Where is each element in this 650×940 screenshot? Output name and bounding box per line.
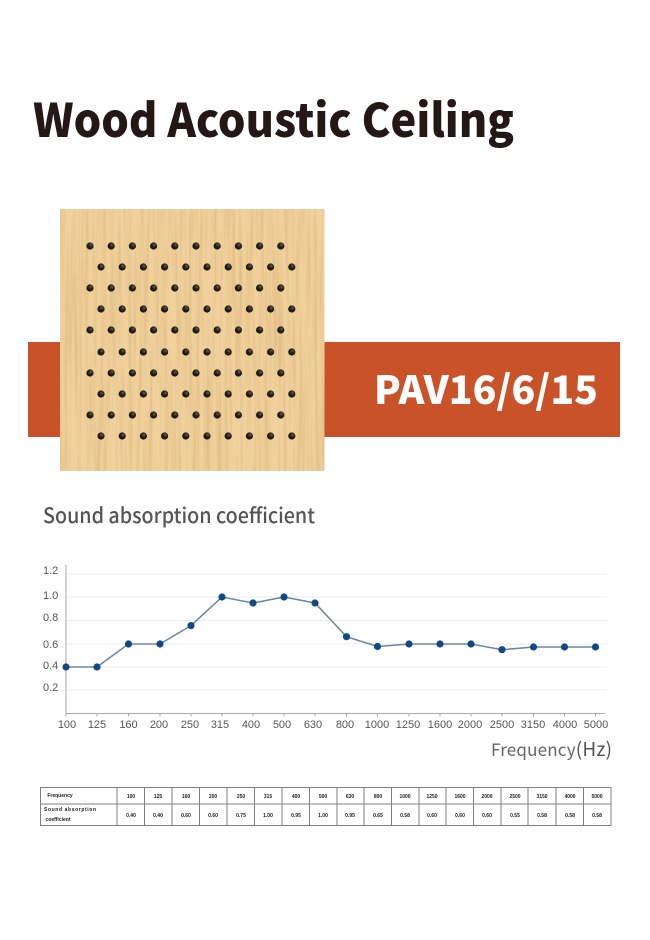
table row: frequency <box>47 793 603 800</box>
axis title: Frequency(Hz) <box>491 735 612 762</box>
x axis labels: 315 <box>211 719 229 731</box>
x axis labels: 200 <box>150 719 168 731</box>
table row: frequency: 100 <box>127 794 135 800</box>
table row: frequency: 2500 <box>509 794 521 800</box>
table row: sound absorption coefficient: 1.00 <box>318 813 328 819</box>
y axis labels <box>43 565 58 694</box>
holes <box>86 242 295 440</box>
x axis labels: 3150 <box>521 719 545 731</box>
x axis labels: 1000 <box>365 719 389 731</box>
table row: sound absorption coefficient <box>44 807 602 823</box>
line chart: sound absorption coefficient by frequency <box>43 565 612 762</box>
perforated wood panel <box>60 209 324 471</box>
x axis labels: 2500 <box>490 719 514 731</box>
x axis labels: 4000 <box>553 719 577 731</box>
table row: sound absorption coefficient: 0.58 <box>400 813 410 819</box>
x axis labels: 125 <box>88 719 106 731</box>
table row: sound absorption coefficient: 0.60 <box>482 813 492 819</box>
table row: sound absorption coefficient: 0.75 <box>236 813 246 819</box>
table row: sound absorption coefficient: 0.60 <box>455 813 465 819</box>
x axis labels: 1250 <box>396 719 420 731</box>
x axis labels: 800 <box>336 719 354 731</box>
x axis labels: 1600 <box>428 719 452 731</box>
table row: sound absorption coefficient: 0.55 <box>510 813 520 819</box>
table row: sound absorption coefficient: 0.58 <box>565 813 575 819</box>
y axis labels: 0.2 <box>43 682 58 694</box>
table row: frequency: 800 <box>374 794 382 800</box>
y axis labels: 1.0 <box>43 590 58 602</box>
table row: frequency: 160 <box>182 794 190 800</box>
x axis labels: 5000 <box>584 719 608 731</box>
x axis labels: 400 <box>242 719 260 731</box>
table row: sound absorption coefficient: 0.60 <box>181 813 191 819</box>
x axis labels <box>58 719 608 731</box>
table row: sound absorption coefficient: 0.40 <box>153 813 163 819</box>
table row: sound absorption coefficient: 0.40 <box>126 813 136 819</box>
x axis labels: 100 <box>58 719 76 731</box>
y axis labels: 0.8 <box>43 612 58 624</box>
table row: frequency: 200 <box>209 794 217 800</box>
table row: frequency: 400 <box>292 794 300 800</box>
table row: sound absorption coefficient: coefficient <box>45 817 71 823</box>
table row: frequency: 315 <box>264 794 272 800</box>
chart heading: Sound absorption coefficient <box>43 500 315 530</box>
table row: sound absorption coefficient: 0.60 <box>427 813 437 819</box>
x axis labels: 250 <box>181 719 199 731</box>
table row: frequency: 125 <box>154 794 162 800</box>
table row: sound absorption coefficient: 0.58 <box>537 813 547 819</box>
title: Wood Acoustic Ceiling <box>33 85 514 151</box>
y axis labels: 1.2 <box>43 565 58 577</box>
x axis labels: 630 <box>304 719 322 731</box>
table row: frequency: 500 <box>319 794 327 800</box>
table row: frequency: 2000 <box>481 794 493 800</box>
table row: frequency: 250 <box>237 794 245 800</box>
data line <box>66 597 596 667</box>
y axis labels: 0.4 <box>43 660 58 672</box>
table row: sound absorption coefficient: 0.95 <box>345 813 355 819</box>
table row: sound absorption coefficient: 0.60 <box>208 813 218 819</box>
table row: sound absorption coefficient: 1.00 <box>263 813 273 819</box>
data points <box>62 593 599 671</box>
x axis labels: 500 <box>273 719 291 731</box>
table row: frequency: 4000 <box>564 794 576 800</box>
table row: frequency: 1600 <box>454 794 466 800</box>
table row: sound absorption coefficient: 0.65 <box>373 813 383 819</box>
data table <box>40 787 611 826</box>
table row: frequency: 5000 <box>591 794 603 800</box>
table row: frequency: 630 <box>346 794 354 800</box>
product code: PAV16/6/15 <box>374 360 598 416</box>
table row: frequency: Frequency <box>47 793 73 799</box>
table row: sound absorption coefficient: 0.95 <box>291 813 301 819</box>
table row: frequency: 1250 <box>426 794 438 800</box>
y axis labels: 0.6 <box>43 639 58 651</box>
table row: frequency: 1000 <box>399 794 411 800</box>
axes <box>66 565 605 716</box>
x axis labels: 2000 <box>458 719 482 731</box>
table row: frequency: 3150 <box>536 794 548 800</box>
orange band with product code <box>28 342 620 437</box>
table row: sound absorption coefficient: 0.58 <box>592 813 602 819</box>
x axis labels: 160 <box>119 719 138 731</box>
table row: sound absorption coefficient: Sound absorption <box>44 807 96 813</box>
